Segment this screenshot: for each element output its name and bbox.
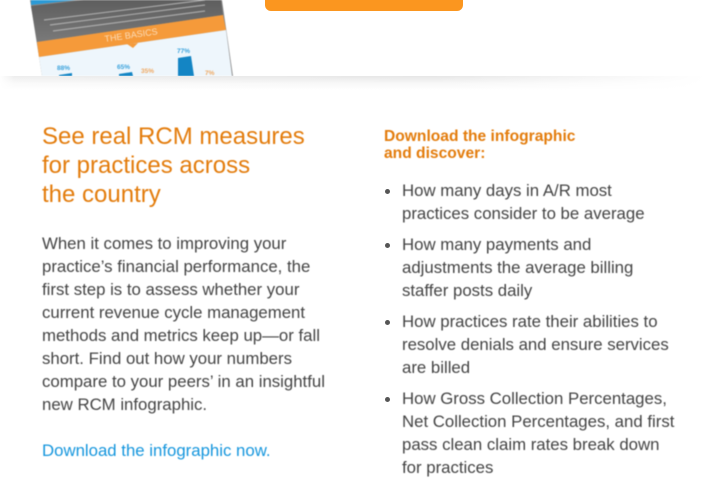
bullet 4: for practices [402, 458, 493, 477]
bullet 3: resolve denials and ensure services [402, 335, 669, 354]
thumbnail blurb [44, 0, 205, 31]
bullet 3: are billed [402, 358, 470, 377]
left body text: current revenue cycle management [42, 303, 305, 322]
bullet 2: staffer posts daily [402, 281, 532, 300]
left heading: the country [42, 181, 161, 208]
left body text: practice’s financial performance, the [42, 257, 310, 276]
download link: Download the infographic now. [42, 441, 271, 460]
right subheading: Download the infographic [384, 128, 575, 145]
bullet 2: How many payments and [402, 235, 591, 254]
left body text: first step is to assess whether your [42, 280, 299, 299]
left heading: for practices across [42, 152, 250, 179]
left body text: compare to your peers’ in an insightful [42, 372, 325, 391]
thumbnail orange band [37, 15, 226, 57]
bullet dots [385, 189, 390, 402]
bullet 3 [402, 312, 669, 377]
bullet 2 [402, 235, 633, 300]
bullet 1: practices consider to be average [402, 204, 645, 223]
header shadow [0, 76, 720, 90]
thumbnail bars: 88% [57, 65, 70, 72]
thumbnail heading: THE BASICS [104, 26, 158, 44]
left body text: methods and metrics keep up—or fall [42, 326, 320, 345]
bullet 4: How Gross Collection Percentages, [402, 389, 667, 408]
right subheading [384, 128, 576, 162]
header area with infographic preview [7, 0, 616, 83]
orange download button [265, 0, 463, 11]
left body text: When it comes to improving your [42, 234, 286, 253]
bullet 4: Net Collection Percentages, and first [402, 412, 674, 431]
bullet 1 [402, 181, 645, 224]
thumbnail light panel [39, 30, 232, 76]
left body text: short. Find out how your numbers [42, 349, 292, 368]
thumbnail bars [57, 48, 215, 77]
left heading: See real RCM measures [42, 123, 305, 150]
thumbnail bars: 65% [117, 64, 130, 71]
thumbnail bars: 35% [141, 68, 154, 75]
bullet 2: adjustments the average billing [402, 258, 633, 277]
left heading [42, 123, 305, 208]
left body text [42, 234, 325, 414]
infographic thumbnail [30, 0, 233, 77]
bullet 4 [402, 389, 675, 478]
bullet 4: pass clean claim rates break down [402, 435, 659, 454]
thumbnail bars: 77% [177, 48, 190, 55]
bullet 1: How many days in A/R most [402, 181, 612, 200]
left body text: new RCM infographic. [42, 395, 207, 414]
bullet 3: How practices rate their abilities to [402, 312, 658, 331]
right subheading: and discover: [384, 145, 485, 162]
thumbnail bars: 7% [205, 70, 215, 77]
